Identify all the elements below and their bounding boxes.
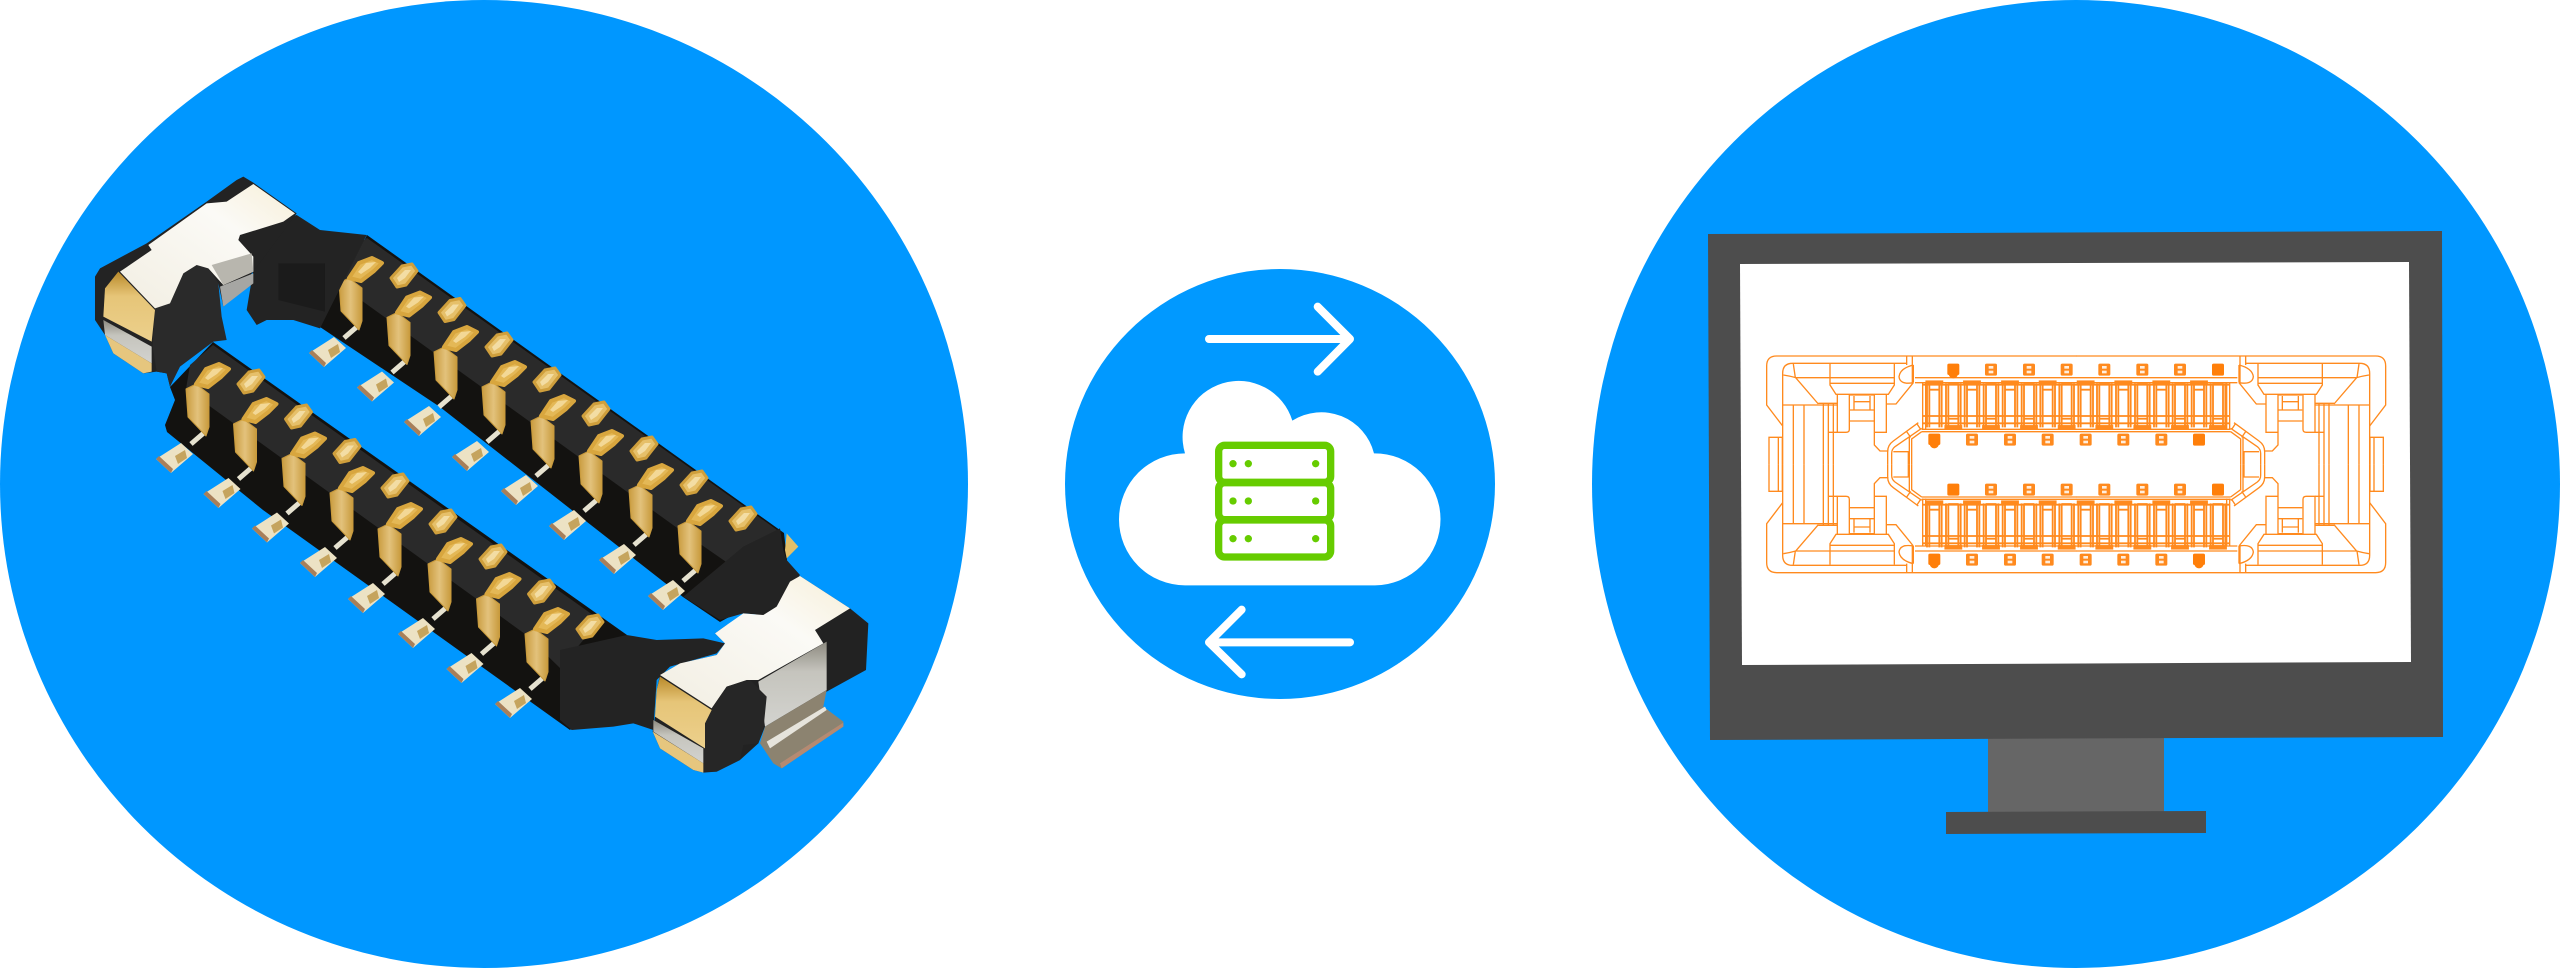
cloud transfer icons xyxy=(1119,307,1440,674)
left circle panel: physical connector xyxy=(0,0,968,968)
monitor screen xyxy=(1740,262,2411,665)
icon: server stack xyxy=(1219,445,1331,557)
solder pads xyxy=(1928,364,2224,568)
arrow: to the right xyxy=(1209,307,1350,372)
monitor base xyxy=(1946,811,2206,834)
arrow: to the left xyxy=(1209,610,1350,674)
icon: cloud xyxy=(1119,381,1440,585)
connector outline xyxy=(1767,356,2386,573)
monitor stand xyxy=(1988,736,2164,813)
upper rail pins xyxy=(309,258,756,610)
lower connector rail xyxy=(165,342,627,730)
CAD drawing of connector xyxy=(1767,356,2386,573)
lower rail pins xyxy=(156,364,603,718)
right end cap xyxy=(560,528,868,773)
monitor frame xyxy=(1708,231,2443,740)
connector product photo illustration xyxy=(95,177,868,773)
icon: computer monitor xyxy=(1708,231,2443,834)
right circle panel: CAD model xyxy=(1592,0,2560,968)
left end cap xyxy=(95,177,367,387)
pin bands xyxy=(1923,381,2230,549)
center circle panel: cloud exchange xyxy=(1065,269,1495,699)
upper connector rail xyxy=(320,235,787,622)
